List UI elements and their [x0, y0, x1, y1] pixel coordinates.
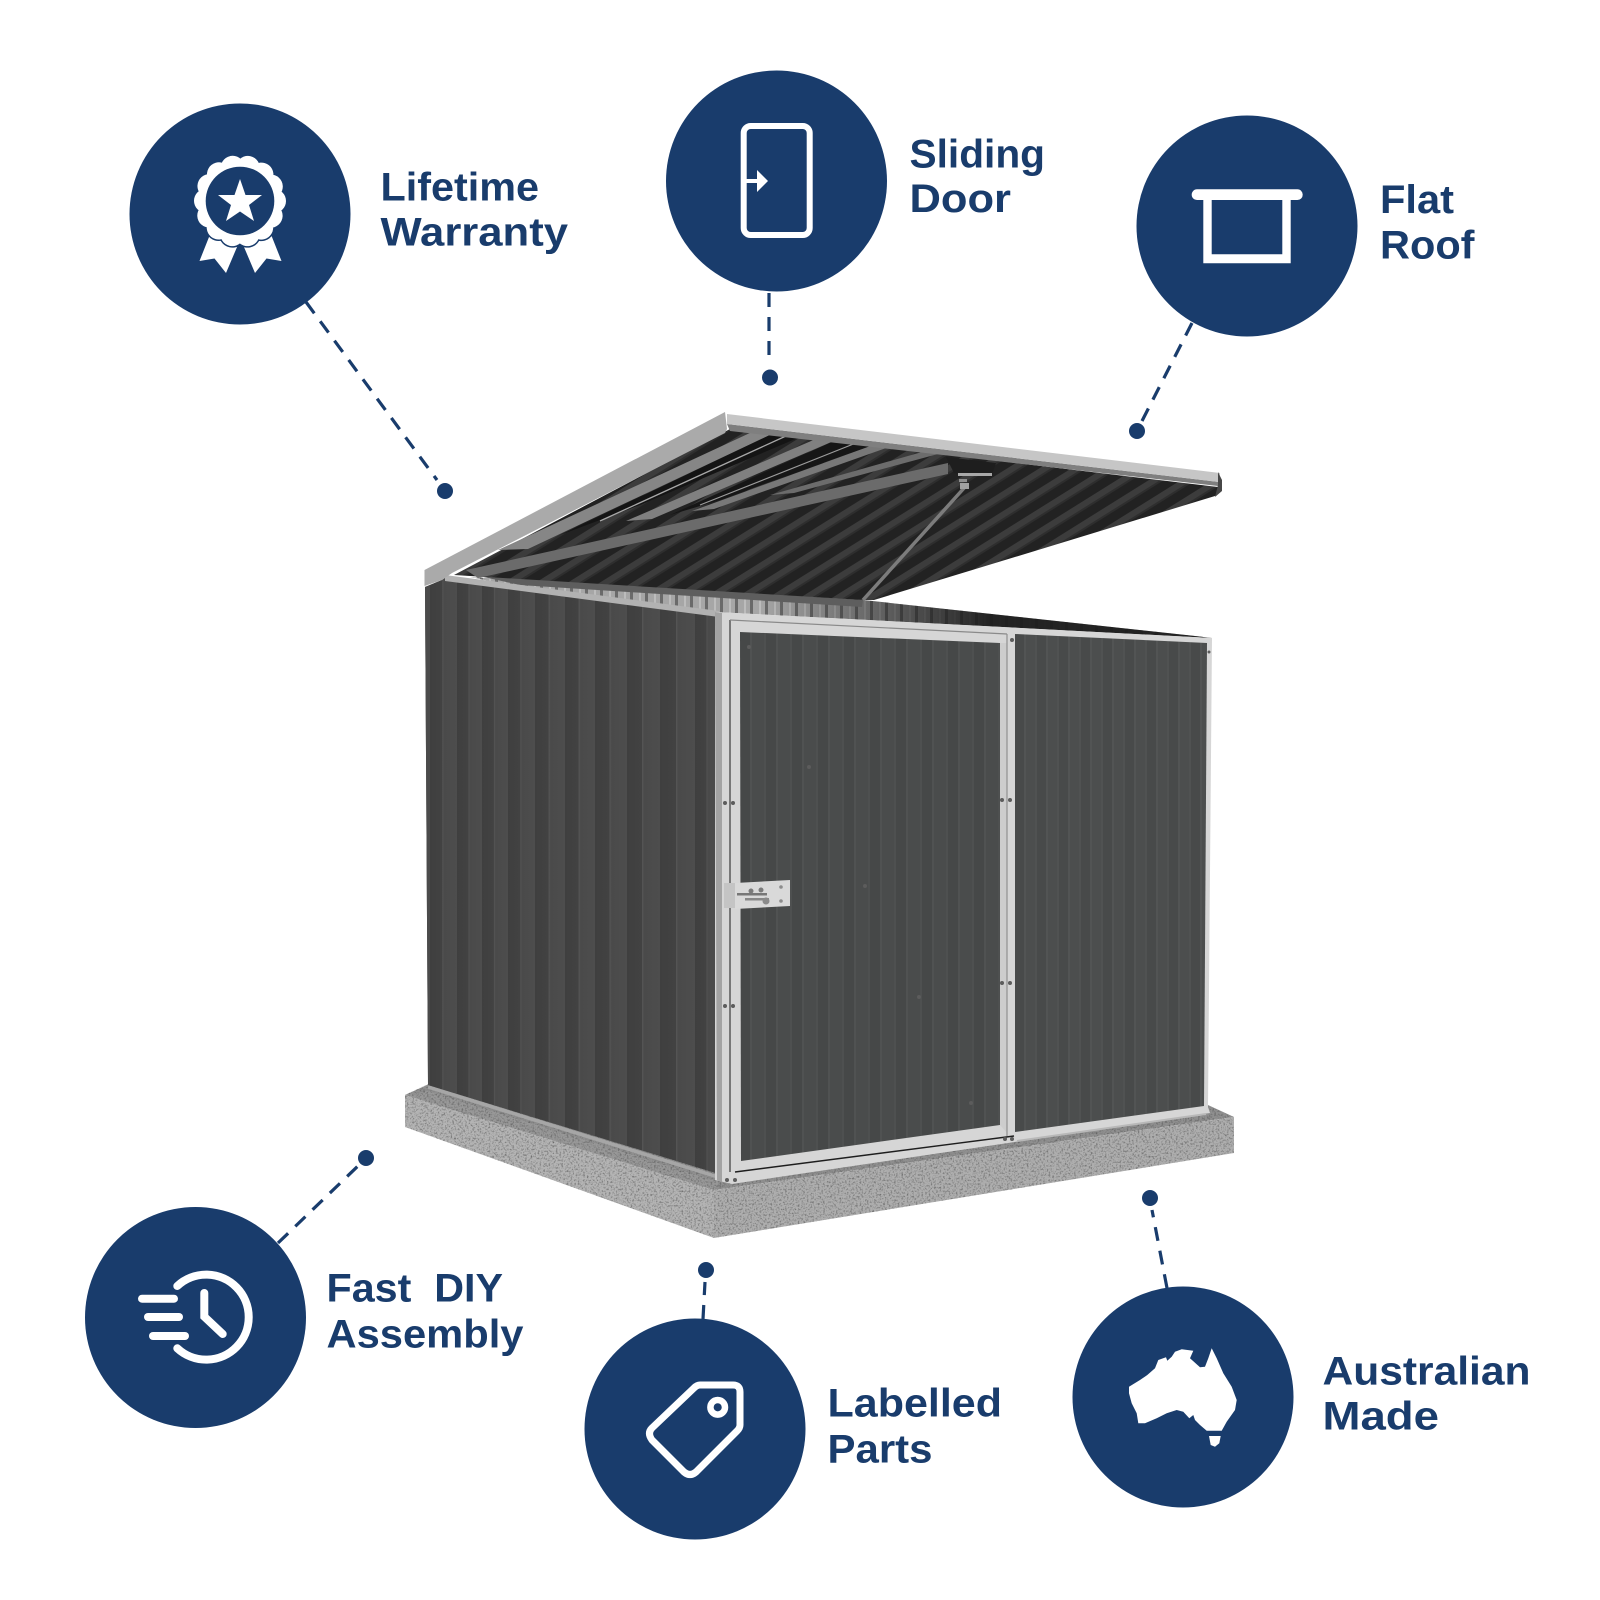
badge circle [85, 1207, 306, 1428]
label: Sliding [910, 132, 1045, 176]
label [1380, 178, 1475, 268]
callout: Fast DIY Assembly [85, 1150, 524, 1428]
icon: rosette medal [200, 167, 282, 273]
label: Assembly [326, 1312, 524, 1356]
badge circle [130, 104, 350, 324]
badge circle [1072, 1286, 1294, 1508]
front frame [715, 612, 1212, 1184]
icon: door with arrow [744, 126, 810, 235]
label: Fast DIY [326, 1266, 503, 1310]
label [380, 166, 569, 254]
icon: flat roof [1192, 189, 1303, 263]
callout: Sliding Door [666, 70, 1045, 386]
icon: fast clock [142, 1275, 249, 1360]
roof stay [863, 487, 965, 600]
roof left fascia [424, 412, 727, 586]
roof cross brace [466, 463, 948, 578]
door panel [740, 632, 1000, 1161]
label: Flat [1380, 178, 1454, 222]
left wall [425, 570, 720, 1180]
callout: Labelled Parts [584, 1262, 1002, 1540]
icon: map of Australia [1129, 1348, 1237, 1447]
label [910, 132, 1045, 221]
label [828, 1382, 1002, 1472]
connector [278, 1150, 374, 1243]
badge circle [666, 70, 887, 292]
callout: Flat Roof [1129, 116, 1475, 439]
roof underside [454, 429, 1221, 600]
roof front fascia [727, 414, 1222, 497]
label [326, 1266, 524, 1356]
fixing bolts [723, 638, 1210, 1182]
label: Australian [1322, 1350, 1530, 1394]
left wall top rail [445, 575, 719, 617]
badge circle [584, 1318, 806, 1540]
icon: price tag [650, 1385, 740, 1474]
connector [1142, 1190, 1167, 1288]
connector [1129, 323, 1192, 439]
door latch [724, 880, 790, 909]
callout: Australian Made [1072, 1190, 1530, 1508]
connector [306, 302, 453, 499]
label: Labelled [828, 1382, 1002, 1426]
connector [698, 1262, 714, 1319]
right wall panel [1015, 634, 1207, 1132]
label: Roof [1380, 224, 1475, 268]
callout: Lifetime Warranty [130, 104, 569, 499]
label: Door [910, 177, 1011, 221]
shed illustration [400, 412, 1240, 1242]
inner back wall visible under the raised roof [470, 574, 1212, 638]
connector [762, 293, 778, 386]
roof bracket [946, 457, 996, 489]
label: Warranty [380, 210, 569, 254]
label [1322, 1350, 1530, 1438]
concrete slab [400, 1080, 1240, 1242]
label: Made [1322, 1394, 1439, 1438]
label: Parts [828, 1428, 932, 1472]
label: Lifetime [380, 166, 539, 210]
badge circle [1136, 116, 1358, 336]
